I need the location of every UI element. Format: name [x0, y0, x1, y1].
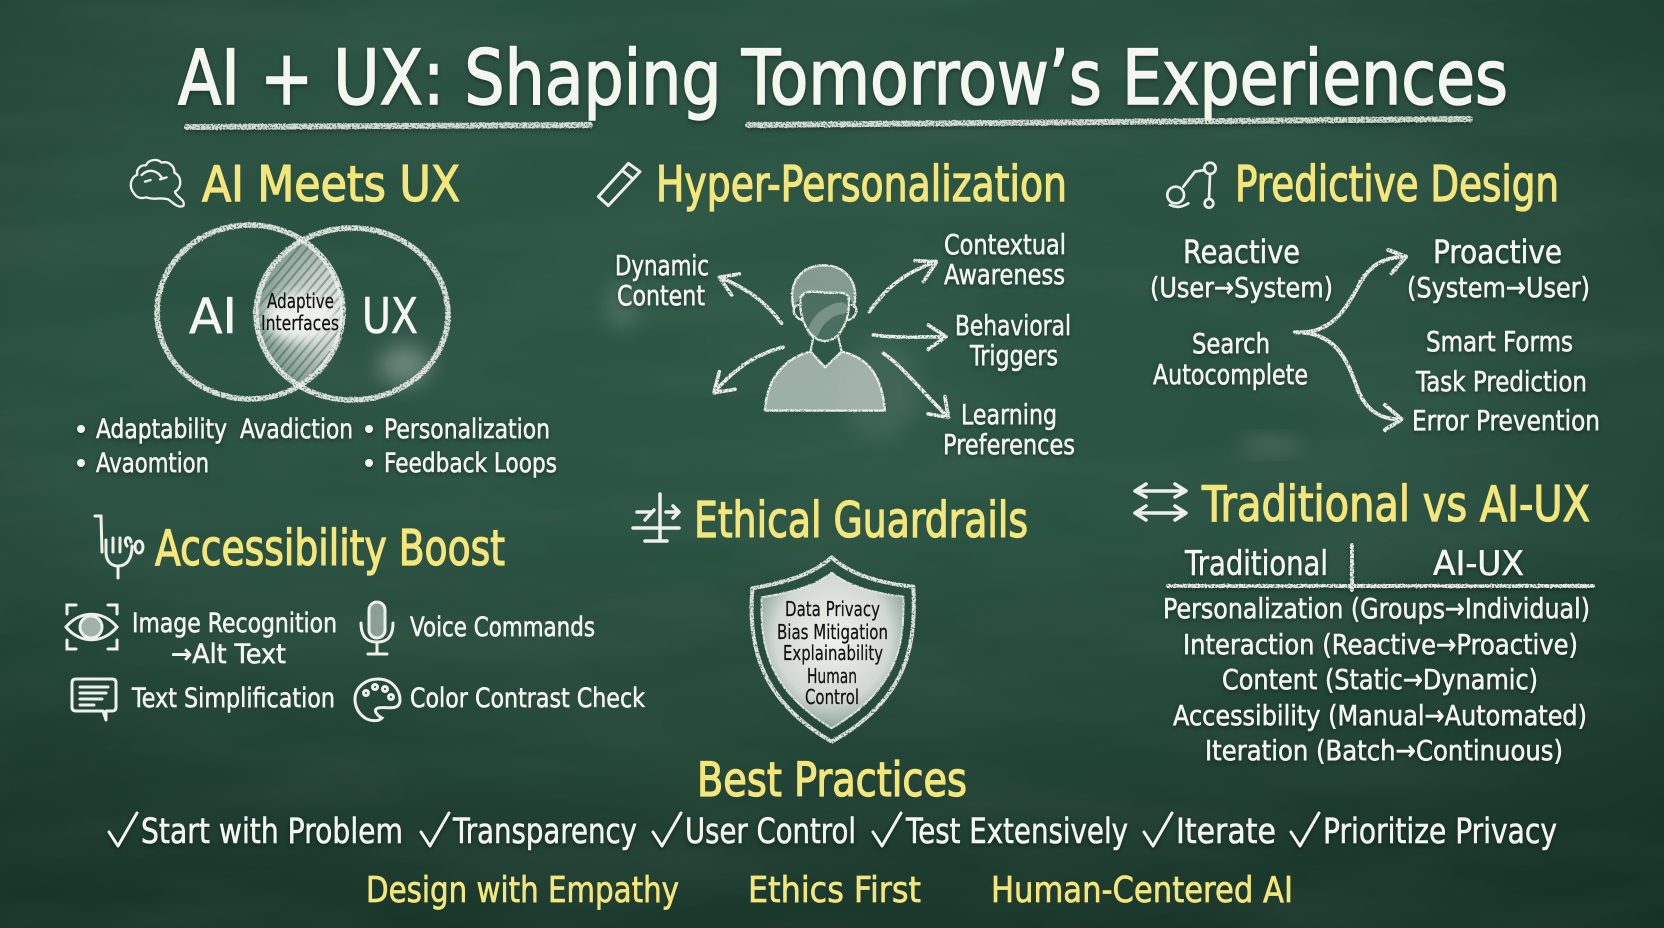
icon: accessibility tuning fork [95, 516, 143, 578]
icon: flow nodes [1167, 163, 1216, 208]
shield text: Human [807, 664, 857, 688]
checklist: User Control [685, 812, 856, 852]
heading: AI Meets UX: AI Meets UX [202, 156, 460, 213]
panel: Hyper-Personalization [598, 156, 1075, 461]
heading: Accessibility Boost: Accessibility Boost [155, 520, 505, 577]
column: Reactive: (User→System) [1150, 271, 1333, 304]
label: Dynamic Content [615, 249, 709, 312]
column: Reactive: Search [1192, 327, 1270, 360]
arrow: branching to Proactive and Error Prevention [1295, 250, 1406, 430]
panel: Best Practices [109, 753, 1557, 911]
shield [752, 557, 914, 742]
panel: Traditional vs AI-UX [1135, 476, 1593, 767]
bullet list [77, 414, 557, 479]
table header [1168, 544, 1593, 590]
bullet list: Feedback Loops [384, 448, 557, 479]
checklist [109, 812, 1557, 852]
column: Proactive: Task Prediction [1415, 365, 1587, 398]
bullet list: Avaomtion [96, 448, 209, 479]
column: Reactive: Reactive [1183, 233, 1300, 271]
table rows: Iteration (Batch→Continuous) [1205, 734, 1563, 767]
shield text: Data Privacy [785, 597, 880, 621]
label: Behavioral Triggers: Behavioral [955, 309, 1071, 342]
column: Proactive: Error Prevention [1412, 404, 1600, 437]
table rows: Content (Static→Dynamic) [1222, 663, 1538, 696]
tagline: Human-Centered AI: Human-Centered AI [991, 870, 1293, 911]
checklist: Prioritize Privacy [1323, 812, 1557, 852]
venn label: AI: AI [189, 288, 237, 345]
icon: document bubble [72, 679, 116, 720]
person illustration [765, 265, 885, 411]
panel: Ethical Guardrails [633, 492, 1028, 742]
panel: AI Meets UX [77, 156, 557, 479]
arrow: to Learning Preferences [883, 353, 948, 417]
shield text: Control [805, 685, 859, 709]
shield text: Bias Mitigation [777, 620, 888, 644]
checklist: Test Extensively [905, 812, 1128, 852]
arrow: lower left [714, 347, 783, 393]
bullet list: Personalization [384, 414, 550, 445]
column: Reactive [1150, 233, 1333, 391]
icon: brain [131, 160, 184, 207]
shield text [777, 597, 888, 709]
column: Reactive: Autocomplete [1153, 358, 1308, 391]
table rows: Interaction (Reactive→Proactive) [1183, 628, 1578, 661]
column: Proactive: (System→User) [1407, 271, 1590, 304]
table header: Traditional [1184, 544, 1328, 584]
checklist: Iterate [1176, 812, 1276, 852]
venn overlap label: Interfaces [261, 311, 339, 335]
column: Proactive [1407, 233, 1600, 437]
icon: balance scale [633, 494, 679, 541]
venn overlap label [261, 289, 339, 335]
item: Image Recognition: Image Recognition [132, 608, 337, 639]
heading: Best Practices: Best Practices [697, 753, 967, 808]
table header: AI-UX [1433, 544, 1524, 584]
label: Behavioral Triggers [955, 309, 1071, 372]
checklist: Start with Problem [141, 812, 403, 852]
tagline: Design with Empathy: Design with Empathy [366, 870, 679, 911]
item: Voice Commands: Voice Commands [410, 612, 595, 643]
tagline: Ethics First: Ethics First [748, 870, 921, 911]
icon: pencil [598, 163, 640, 206]
item: Color Contrast Check [355, 679, 645, 721]
panel: Accessibility Boost [66, 516, 645, 721]
item: Image Recognition [66, 605, 337, 670]
heading: Traditional vs AI-UX: Traditional vs AI-UX [1201, 476, 1590, 533]
bullet list: Avadiction [240, 414, 353, 445]
venn diagram [157, 225, 448, 400]
table rows: Accessibility (Manual→Automated) [1173, 699, 1587, 732]
icon: palette [355, 679, 400, 721]
table rows [1163, 592, 1590, 767]
venn overlap label: Adaptive [267, 289, 334, 313]
item: Text Simplification [72, 679, 335, 720]
venn label: UX: UX [362, 288, 418, 345]
heading: Predictive Design: Predictive Design [1235, 156, 1559, 213]
checklist: Transparency [452, 812, 637, 852]
arrow: to Contextual Awareness [869, 261, 937, 312]
table rows: Personalization (Groups→Individual) [1163, 592, 1590, 625]
column: Proactive: Proactive [1433, 233, 1562, 271]
comparison table [1163, 544, 1593, 767]
label: Dynamic Content: Content [617, 279, 705, 312]
icon: microphone [361, 602, 393, 654]
arrow: to Behavioral Triggers [873, 325, 946, 349]
heading: Hyper-Personalization: Hyper-Personalization [656, 156, 1067, 213]
bullet list: Adaptability [96, 414, 227, 445]
label: Contextual Awareness [944, 228, 1066, 291]
label: Dynamic Content: Dynamic [615, 249, 709, 282]
item: Text Simplification: Text Simplification [131, 683, 335, 714]
item: Voice Commands [361, 602, 595, 654]
label: Learning Preferences: Preferences [943, 428, 1075, 461]
panel: Predictive Design [1150, 156, 1600, 437]
label: Contextual Awareness: Contextual [944, 228, 1066, 261]
column: Proactive: Smart Forms [1426, 325, 1573, 358]
label: Learning Preferences: Learning [961, 398, 1057, 431]
label: Contextual Awareness: Awareness [944, 258, 1065, 291]
item: Color Contrast Check: Color Contrast Check [410, 683, 645, 714]
icon: eye [66, 605, 117, 649]
item: Image Recognition: →Alt Text [171, 639, 286, 670]
icon: swap arrows [1135, 484, 1186, 520]
heading: Ethical Guardrails: Ethical Guardrails [694, 492, 1028, 549]
arrow: to Dynamic Content [719, 274, 782, 323]
label: Learning Preferences [943, 398, 1075, 461]
label: Behavioral Triggers: Triggers [969, 339, 1058, 372]
shield text: Explainability [783, 641, 883, 665]
